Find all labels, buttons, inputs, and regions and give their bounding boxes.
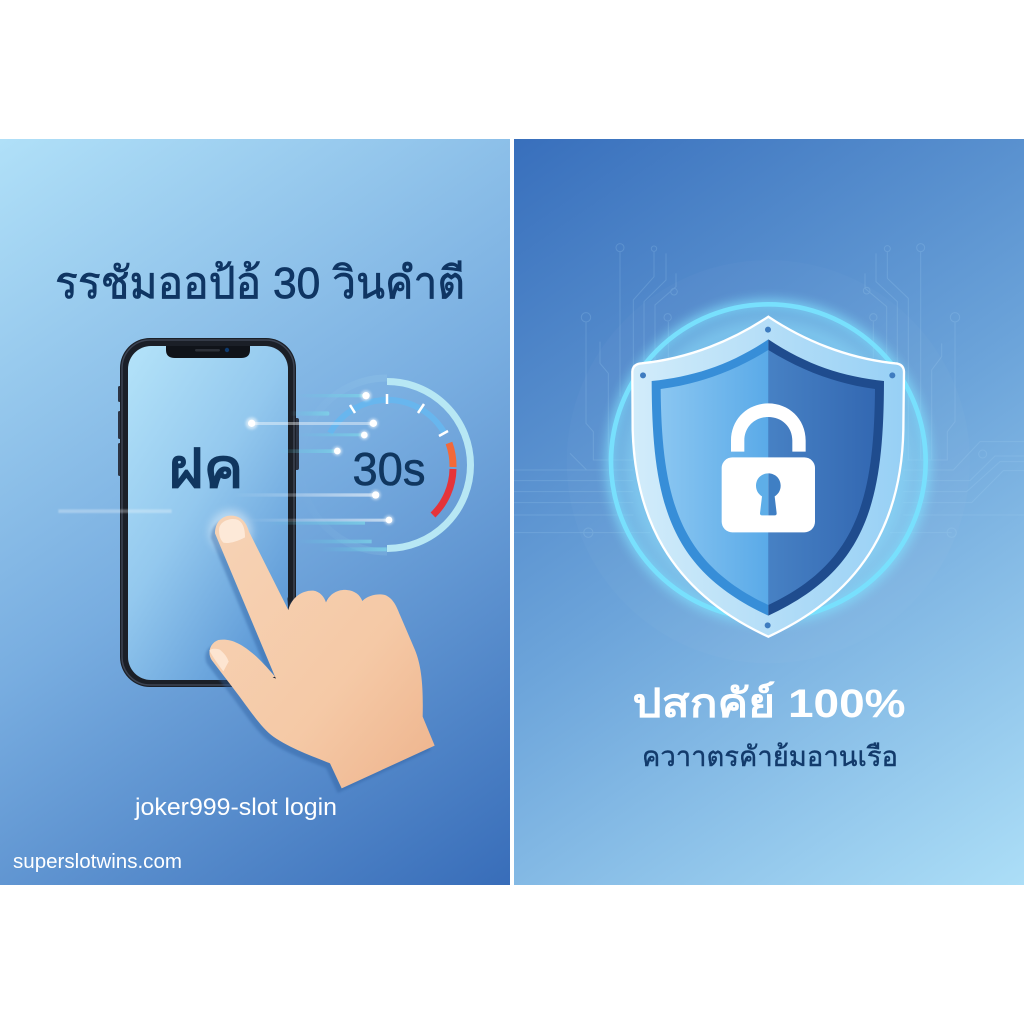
panel: left deposit speed [0,139,510,885]
title: left panel heading: รรชัมออป้อ้ 30 วินคำตี [55,259,465,308]
text: gauge value: 30s [352,443,426,495]
icon: padlock [722,403,815,532]
speed lines with glowing dots [58,390,394,551]
icon: shield with padlock [632,317,904,637]
text: right panel subheading: ควาาตรคัาย้มอานเรือ [642,741,898,772]
panel: right security [513,139,1024,885]
text: right panel heading: ปสกคัย์ 100% [632,681,906,726]
text: phone screen label: ฝค [168,439,244,499]
text: login caption: joker999-slot login [134,794,337,821]
icon: smartphone [118,338,299,687]
glow halo and ring [600,292,936,627]
circuit background pattern [513,244,1024,537]
chart: 30 second gauge [328,378,474,556]
icon: pointing hand [205,510,435,793]
text: website: superslotwins.com [13,851,182,873]
